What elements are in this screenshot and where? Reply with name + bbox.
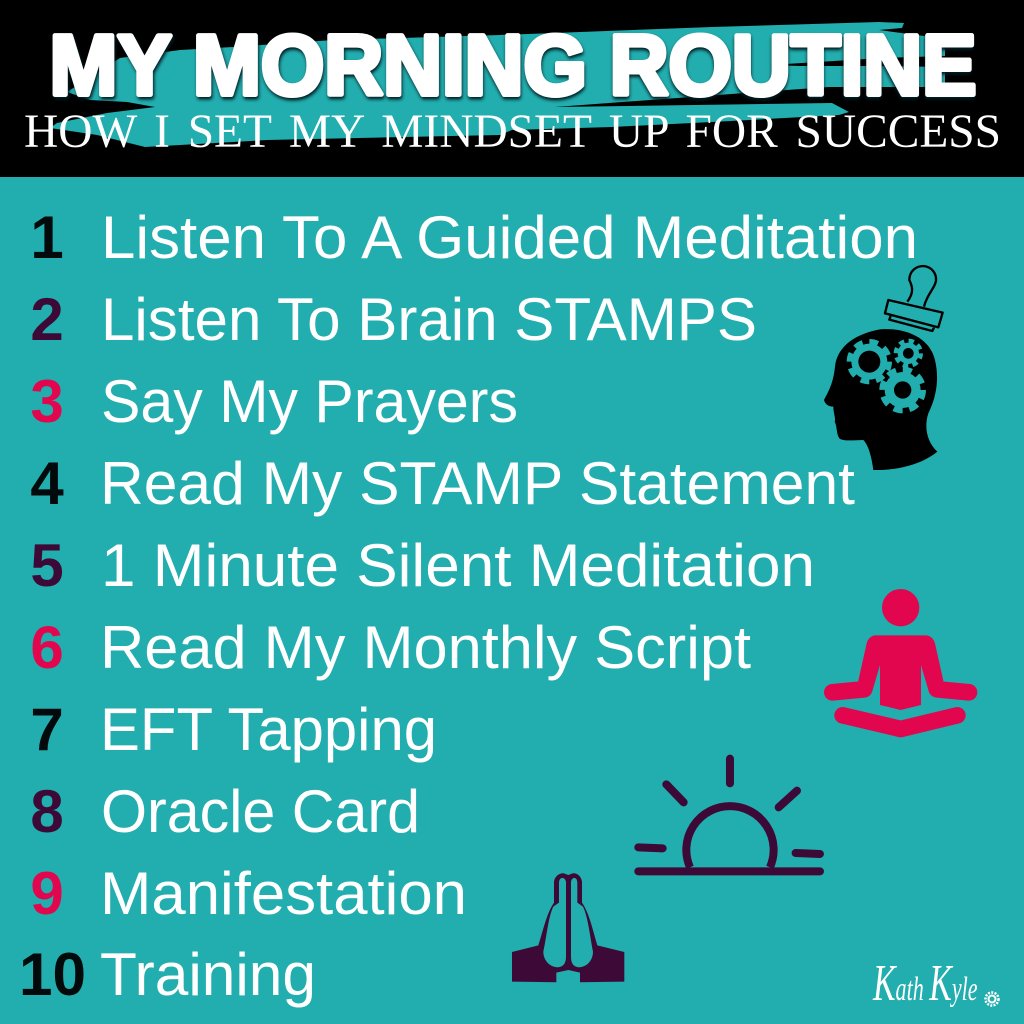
icon: meditating figure [832, 589, 969, 729]
list item 8: Oracle Card [101, 778, 420, 845]
list item 5: 1 Minute Silent Meditation [101, 532, 815, 599]
list item 6: 6 [30, 614, 64, 681]
icon: praying hands [512, 873, 624, 982]
list item 6: Read My Monthly Script [100, 614, 751, 681]
subtitle: HOW I SET MY MINDSET UP FOR SUCCESS [24, 105, 1001, 158]
header banner [0, 0, 1024, 177]
gears [850, 341, 923, 410]
title: MY MORNING ROUTINE [51, 21, 976, 116]
title: MY MORNING ROUTINE [50, 18, 976, 114]
list item 10: 10 [19, 941, 86, 1008]
list item 3: Say My Prayers [101, 368, 518, 435]
head silhouette [824, 329, 937, 470]
list item 8: 8 [30, 778, 64, 845]
brush stroke [50, 22, 945, 147]
signature logo: Kath Kyle [872, 955, 978, 1012]
list item 1: 1 [30, 204, 64, 271]
stamp [885, 266, 943, 331]
list item 4: 4 [30, 450, 64, 517]
list item 1: Listen To A Guided Meditation [101, 204, 918, 271]
list item 9: 9 [30, 860, 64, 927]
list item 2: 2 [30, 286, 64, 353]
list item 7: EFT Tapping [100, 696, 437, 763]
list item 10: Training [100, 941, 316, 1008]
icon: head with gears and stamp [824, 266, 943, 470]
list item 9: Manifestation [100, 860, 467, 927]
list item 4: Read My STAMP Statement [100, 450, 855, 517]
list item 2: Listen To Brain STAMPS [101, 286, 757, 353]
icon: mandala flower [986, 992, 998, 1006]
list item 3: 3 [30, 368, 64, 435]
list item 5: 5 [30, 532, 64, 599]
icon: sunrise [638, 759, 820, 871]
list item 7: 7 [30, 696, 64, 763]
